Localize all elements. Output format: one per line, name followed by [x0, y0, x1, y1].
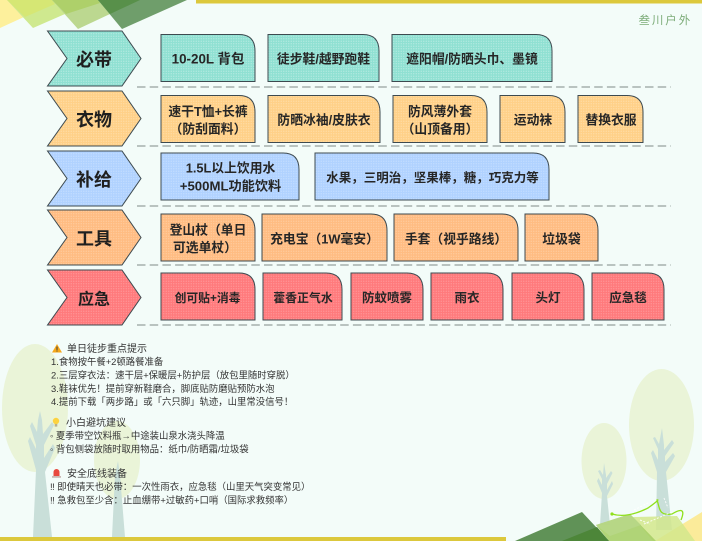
text block: 小白避坑建议: ◦ 夏季带空饮料瓶→中途装山泉水浇头降温	[50, 430, 225, 441]
chevron: 必带: 必带	[76, 50, 112, 70]
item: 1.5L以上饮用水 +500ML功能饮料: +500ML功能饮料	[180, 178, 281, 194]
tree: bottom-right small	[582, 423, 626, 525]
icon: warning triangle	[52, 344, 62, 352]
text block: 小白避坑建议: ◦ 背包侧袋放随时取用物品：纸巾/防晒霜/垃圾袋	[50, 444, 249, 454]
bottom-right decorative ribbons	[515, 512, 702, 541]
chevron: 应急: 应急	[78, 290, 110, 308]
item: 10-20L 背包	[161, 34, 255, 82]
item: 手套（视乎路线）: 手套（视乎路线）	[405, 232, 507, 246]
text block: 小白避坑建议: 小白避坑建议	[66, 416, 126, 429]
row: 应急	[48, 270, 664, 325]
item: 1.5L以上饮用水 +500ML功能饮料	[161, 153, 299, 200]
text block: 单日徒步重点提示: 1.食物按午餐+2顿路餐准备	[51, 356, 164, 367]
chevron: 工具: 工具	[76, 229, 112, 249]
item: 垃圾袋: 垃圾袋	[542, 232, 581, 246]
tree: bottom-left large	[2, 344, 68, 537]
item: 运动袜	[500, 96, 565, 142]
chevron: 必带	[48, 31, 141, 86]
tree: bottom-right large	[629, 369, 694, 530]
item: 藿香正气水	[263, 273, 342, 320]
item: 徒步鞋/越野跑鞋: 徒步鞋/越野跑鞋	[277, 52, 370, 66]
item: 速干T恤+长裤（防刮面料）: （防刮面料）	[170, 122, 246, 136]
item: 创可贴+消毒	[161, 273, 255, 320]
item: 垃圾袋	[525, 214, 598, 261]
item: 防晒冰袖/皮肤衣: 防晒冰袖/皮肤衣	[277, 112, 371, 128]
text block: 安全底线装备: ‼ 急救包至少含：止血绷带+过敏药+口哨（国际求救频率）	[50, 494, 293, 506]
text block: 安全底线装备: 安全底线装备	[67, 467, 127, 480]
item: 遮阳帽/防晒头巾、墨镜	[392, 34, 552, 82]
icon: light bulb	[53, 418, 59, 427]
item: 登山杖（单日可选单杖）: 登山杖（单日	[170, 222, 246, 238]
row: 工具	[48, 210, 598, 265]
item: 雨衣	[431, 273, 503, 320]
text block: 单日徒步重点提示: 4.提前下载「两步路」或「六只脚」轨迹，山里常没信号！	[51, 396, 293, 407]
chevron: 衣物	[48, 91, 141, 146]
row: 补给	[48, 151, 549, 206]
top yellow bar	[196, 0, 702, 4]
item: 徒步鞋/越野跑鞋	[268, 34, 379, 82]
chevron: 补给: 补给	[76, 170, 112, 190]
item: 充电宝（1W毫安）	[262, 214, 387, 261]
row dividers	[137, 87, 671, 325]
item: 运动袜: 运动袜	[514, 112, 552, 128]
item: 防风薄外套（山顶备用）	[393, 96, 487, 142]
row: 必带	[48, 31, 552, 86]
text block: 单日徒步重点提示	[51, 342, 295, 407]
item: 藿香正气水: 藿香正气水	[273, 291, 333, 305]
item: 防晒冰袖/皮肤衣	[268, 96, 380, 142]
item: 速干T恤+长裤（防刮面料）: 速干T恤+长裤	[168, 104, 248, 119]
item: 水果，三明治，坚果棒，糖，巧克力等: 水果，三明治，坚果棒，糖，巧克力等	[326, 170, 539, 185]
text block: 单日徒步重点提示: 2.三层穿衣法：速干层+保暖层+防护层（放包里随时穿脱）	[51, 370, 295, 380]
item: 速干T恤+长裤（防刮面料）	[161, 96, 255, 142]
item: 头灯	[512, 273, 584, 320]
row: 衣物	[48, 91, 643, 146]
item: 遮阳帽/防晒头巾、墨镜: 遮阳帽/防晒头巾、墨镜	[406, 52, 538, 66]
item: 1.5L以上饮用水 +500ML功能饮料: 1.5L以上饮用水	[186, 160, 275, 176]
item: 登山杖（单日可选单杖）: 可选单杖）	[173, 240, 237, 255]
item: 防风薄外套（山顶备用）: （山顶备用）	[402, 122, 478, 136]
item: 防风薄外套（山顶备用）: 防风薄外套	[408, 104, 472, 119]
item: 水果，三明治，坚果棒，糖，巧克力等	[315, 153, 549, 200]
item: 防蚊喷雾: 防蚊喷雾	[362, 290, 412, 305]
item: 防蚊喷雾	[351, 273, 423, 320]
text block: 安全底线装备	[50, 467, 310, 506]
brand watermark: 叁川户外	[638, 13, 692, 27]
item: 登山杖（单日可选单杖）	[161, 214, 255, 261]
top-left decorative ribbons	[0, 0, 187, 29]
icon: red siren	[52, 469, 61, 478]
text block: 小白避坑建议	[50, 416, 249, 454]
item: 手套（视乎路线）	[394, 214, 518, 261]
text block: 单日徒步重点提示: 3.鞋袜优先！提前穿新鞋磨合，脚底贴防磨贴预防水泡	[51, 383, 274, 394]
text block: 安全底线装备: ‼ 即使晴天也必带：一次性雨衣，应急毯（山里天气突变常见）	[50, 481, 310, 492]
chevron: 衣物: 衣物	[76, 109, 112, 130]
tree: bottom-left small	[94, 421, 140, 537]
bottom yellow bar	[0, 537, 506, 541]
item: 应急毯	[592, 273, 664, 320]
item: 应急毯: 应急毯	[609, 290, 647, 305]
item: 替换衣服: 替换衣服	[585, 112, 637, 128]
handwritten lime logo scribble	[610, 498, 683, 524]
item: 雨衣: 雨衣	[454, 290, 480, 305]
chevron: 补给	[48, 151, 141, 206]
text block: 单日徒步重点提示: 单日徒步重点提示	[67, 342, 147, 355]
chevron: 应急	[48, 270, 141, 325]
item: 充电宝（1W毫安）: 充电宝（1W毫安）	[270, 232, 379, 246]
item: 创可贴+消毒: 创可贴+消毒	[175, 291, 241, 305]
item: 10-20L 背包: 10-20L 背包	[172, 50, 244, 66]
item: 头灯: 头灯	[535, 290, 561, 305]
item: 替换衣服	[578, 96, 643, 142]
chevron: 工具	[48, 210, 141, 265]
